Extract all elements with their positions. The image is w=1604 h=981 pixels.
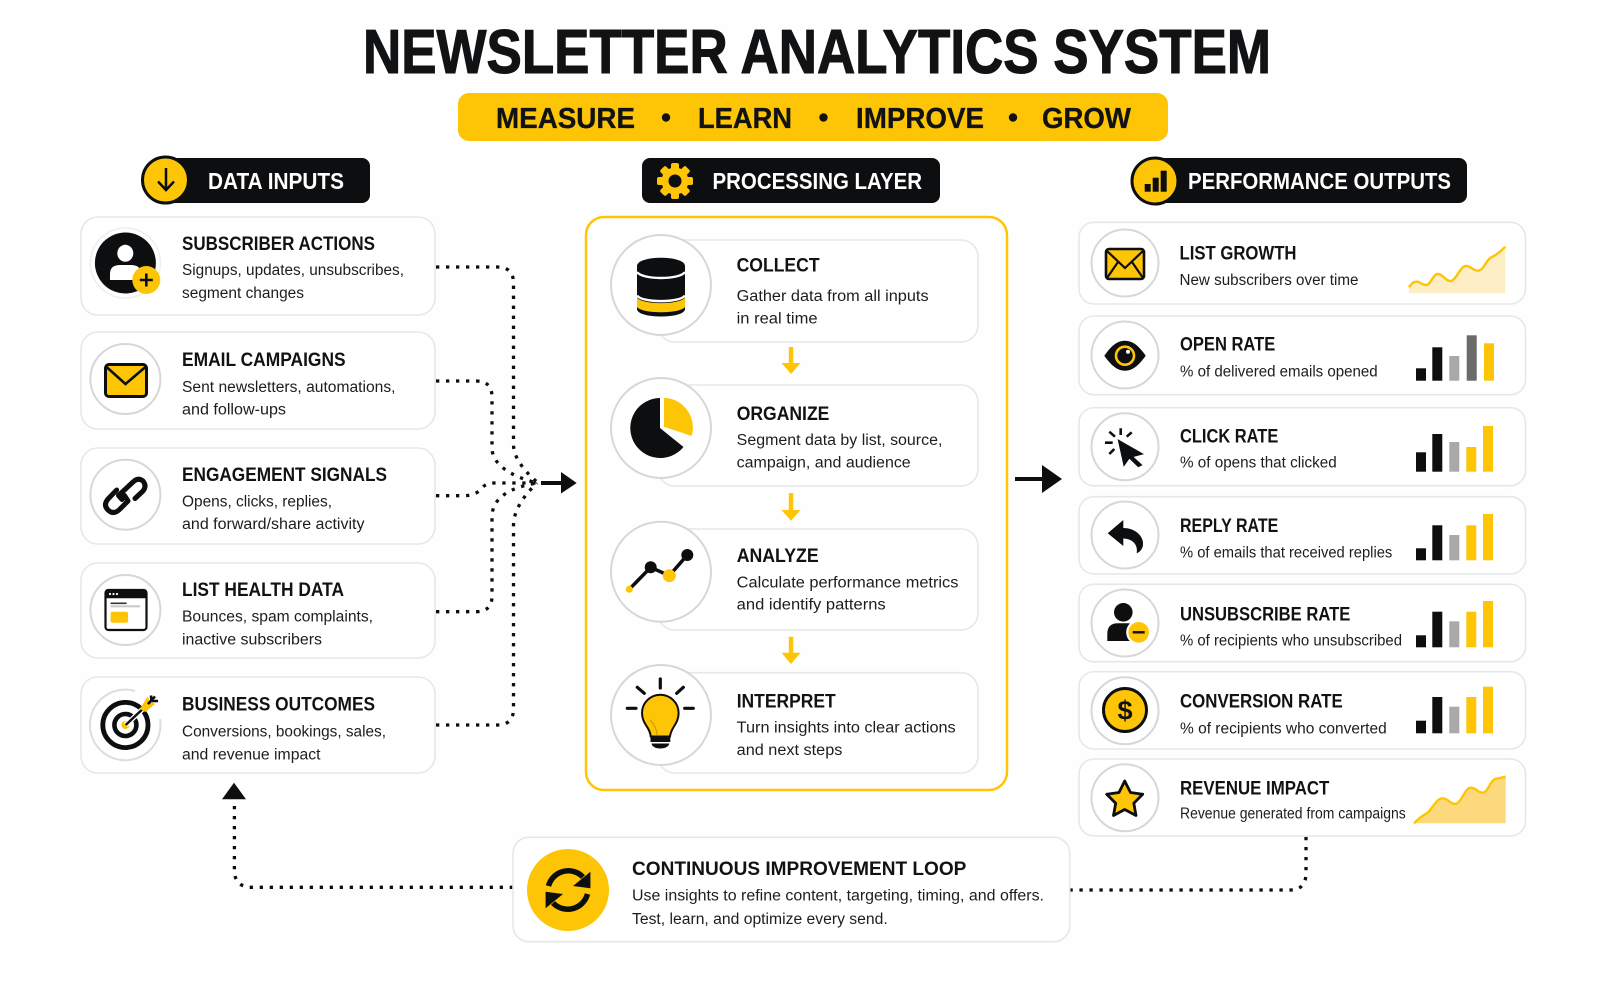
step: analyze: Calculate performance metrics	[737, 574, 959, 591]
section header: performance outputs	[1132, 158, 1467, 204]
card: click rate: CLICK RATE	[1180, 426, 1278, 448]
section header: performance outputs: PERFORMANCE OUTPUTS	[1188, 168, 1451, 194]
tagline banner: LEARN	[698, 103, 792, 135]
card: revenue impact: Revenue generated from campaigns	[1180, 805, 1406, 822]
card: conversion rate: CONVERSION RATE	[1180, 690, 1343, 712]
icon: light bulb	[627, 679, 693, 748]
card: revenue impact	[1079, 759, 1526, 836]
card: continuous improvement loop: Use insights to refine content, targeting, timing, and offers.	[632, 888, 1044, 905]
arrow: organize to analyze	[782, 493, 800, 521]
bar chart: reply rate	[1416, 514, 1493, 560]
card: subscriber actions: segment changes	[182, 285, 304, 302]
card: list health data: Bounces, spam complaints,	[182, 609, 373, 626]
step: collect: Gather data from all inputs	[737, 288, 929, 305]
card: reply rate	[1079, 497, 1526, 574]
card: continuous improvement loop: Test, learn, and optimize every send.	[632, 911, 888, 928]
icon: envelope	[90, 344, 160, 414]
card: email campaigns: EMAIL CAMPAIGNS	[182, 349, 346, 371]
card: reply rate: % of emails that received replies	[1180, 545, 1393, 562]
step: organize: campaign, and audience	[737, 454, 911, 471]
tagline banner: IMPROVE	[856, 103, 984, 135]
icon: browser window	[90, 575, 160, 645]
bar chart: unsubscribe rate	[1416, 601, 1493, 647]
card: unsubscribe rate: % of recipients who unsubscribed	[1180, 632, 1402, 649]
card: conversion rate: % of recipients who converted	[1180, 720, 1387, 737]
step: analyze: ANALYZE	[737, 545, 819, 567]
step: organize: ORGANIZE	[737, 403, 829, 425]
card: reply rate: REPLY RATE	[1180, 515, 1278, 537]
bar chart: click rate	[1416, 426, 1493, 472]
card: engagement signals: Opens, clicks, replies,	[182, 494, 332, 511]
card: email campaigns	[81, 332, 435, 429]
card: subscriber actions	[81, 217, 435, 315]
card: continuous improvement loop	[513, 837, 1070, 942]
card: list growth: New subscribers over time	[1180, 272, 1358, 289]
card: open rate	[1079, 316, 1526, 395]
card: business outcomes: Conversions, bookings, sales,	[182, 724, 386, 741]
card: revenue impact: REVENUE IMPACT	[1180, 778, 1329, 800]
card: click rate: % of opens that clicked	[1180, 455, 1337, 472]
area chart: revenue impact	[1414, 777, 1506, 823]
step: collect: in real time	[737, 310, 818, 327]
icon: reply arrow	[1092, 502, 1158, 568]
card: business outcomes	[81, 677, 435, 773]
card: list health data: LIST HEALTH DATA	[182, 579, 344, 601]
card: subscriber actions: Signups, updates, unsubscribes,	[182, 262, 404, 279]
step: organize	[611, 378, 978, 486]
card: continuous improvement loop: CONTINUOUS IMPROVEMENT LOOP	[632, 858, 966, 880]
section header: data inputs	[142, 157, 370, 203]
icon: database	[637, 258, 685, 316]
card: business outcomes: BUSINESS OUTCOMES	[182, 694, 375, 716]
card: engagement signals: ENGAGEMENT SIGNALS	[182, 464, 387, 486]
icon: dollar coin: $	[1117, 696, 1133, 726]
card: list health data	[81, 563, 435, 658]
loop connector: outputs to loop card	[1070, 837, 1306, 890]
icon: pie chart	[630, 398, 693, 458]
card: open rate: % of delivered emails opened	[1180, 364, 1378, 381]
icon: chain link	[90, 460, 160, 530]
icon: target with arrow	[90, 690, 160, 760]
connector lines from inputs	[436, 267, 537, 725]
step: organize: Segment data by list, source,	[737, 432, 942, 449]
card: business outcomes: and revenue impact	[182, 746, 321, 763]
card: engagement signals	[81, 448, 435, 544]
card: click rate	[1079, 408, 1526, 486]
step: interpret: INTERPRET	[737, 691, 836, 713]
card: conversion rate	[1079, 672, 1526, 749]
step: interpret	[611, 665, 978, 773]
card: email campaigns: Sent newsletters, automations,	[182, 379, 396, 396]
card: open rate: OPEN RATE	[1180, 334, 1275, 356]
card: unsubscribe rate: UNSUBSCRIBE RATE	[1180, 603, 1350, 625]
step: interpret: and next steps	[737, 742, 843, 759]
section header: processing layer: PROCESSING LAYER	[712, 168, 922, 194]
icon: user minus	[1092, 590, 1158, 656]
icon: line chart	[626, 549, 693, 593]
tagline banner: MEASURE	[496, 103, 635, 135]
card: email campaigns: and follow-ups	[182, 402, 286, 418]
loop connector: loop card to inputs	[222, 783, 513, 887]
icon: envelope	[1092, 230, 1158, 296]
icon: subscriber add	[90, 228, 160, 298]
step: collect: COLLECT	[737, 255, 820, 277]
bar chart: conversion rate	[1416, 687, 1493, 733]
section header: processing layer	[642, 158, 940, 203]
tagline banner	[458, 93, 1168, 141]
step: interpret: Turn insights into clear actions	[737, 720, 956, 737]
step: analyze	[611, 522, 978, 630]
icon: star	[1092, 764, 1158, 831]
card: engagement signals: and forward/share activity	[182, 516, 365, 533]
icon: refresh loop	[527, 849, 609, 931]
panel: processing layer	[586, 217, 1007, 790]
card: list health data: inactive subscribers	[182, 631, 322, 648]
icon: cursor click	[1092, 413, 1158, 480]
area chart: list growth	[1409, 247, 1505, 293]
icon: dollar coin	[1092, 677, 1158, 744]
tagline banner: GROW	[1042, 103, 1132, 135]
icon: eye	[1092, 322, 1158, 388]
card: unsubscribe rate	[1079, 584, 1526, 662]
step: analyze: and identify patterns	[737, 596, 886, 613]
step: collect	[611, 235, 978, 342]
card: list growth: LIST GROWTH	[1180, 242, 1296, 264]
arrow to outputs	[1015, 465, 1062, 493]
bar chart: open rate	[1416, 335, 1494, 381]
arrow: analyze to interpret	[782, 637, 800, 664]
arrow: collect to organize	[782, 347, 800, 374]
card: subscriber actions: SUBSCRIBER ACTIONS	[182, 233, 375, 255]
card: list growth	[1079, 222, 1526, 304]
section header: data inputs: DATA INPUTS	[208, 168, 344, 194]
title: NEWSLETTER ANALYTICS SYSTEM	[363, 18, 1271, 87]
arrow into processing layer	[541, 472, 577, 494]
